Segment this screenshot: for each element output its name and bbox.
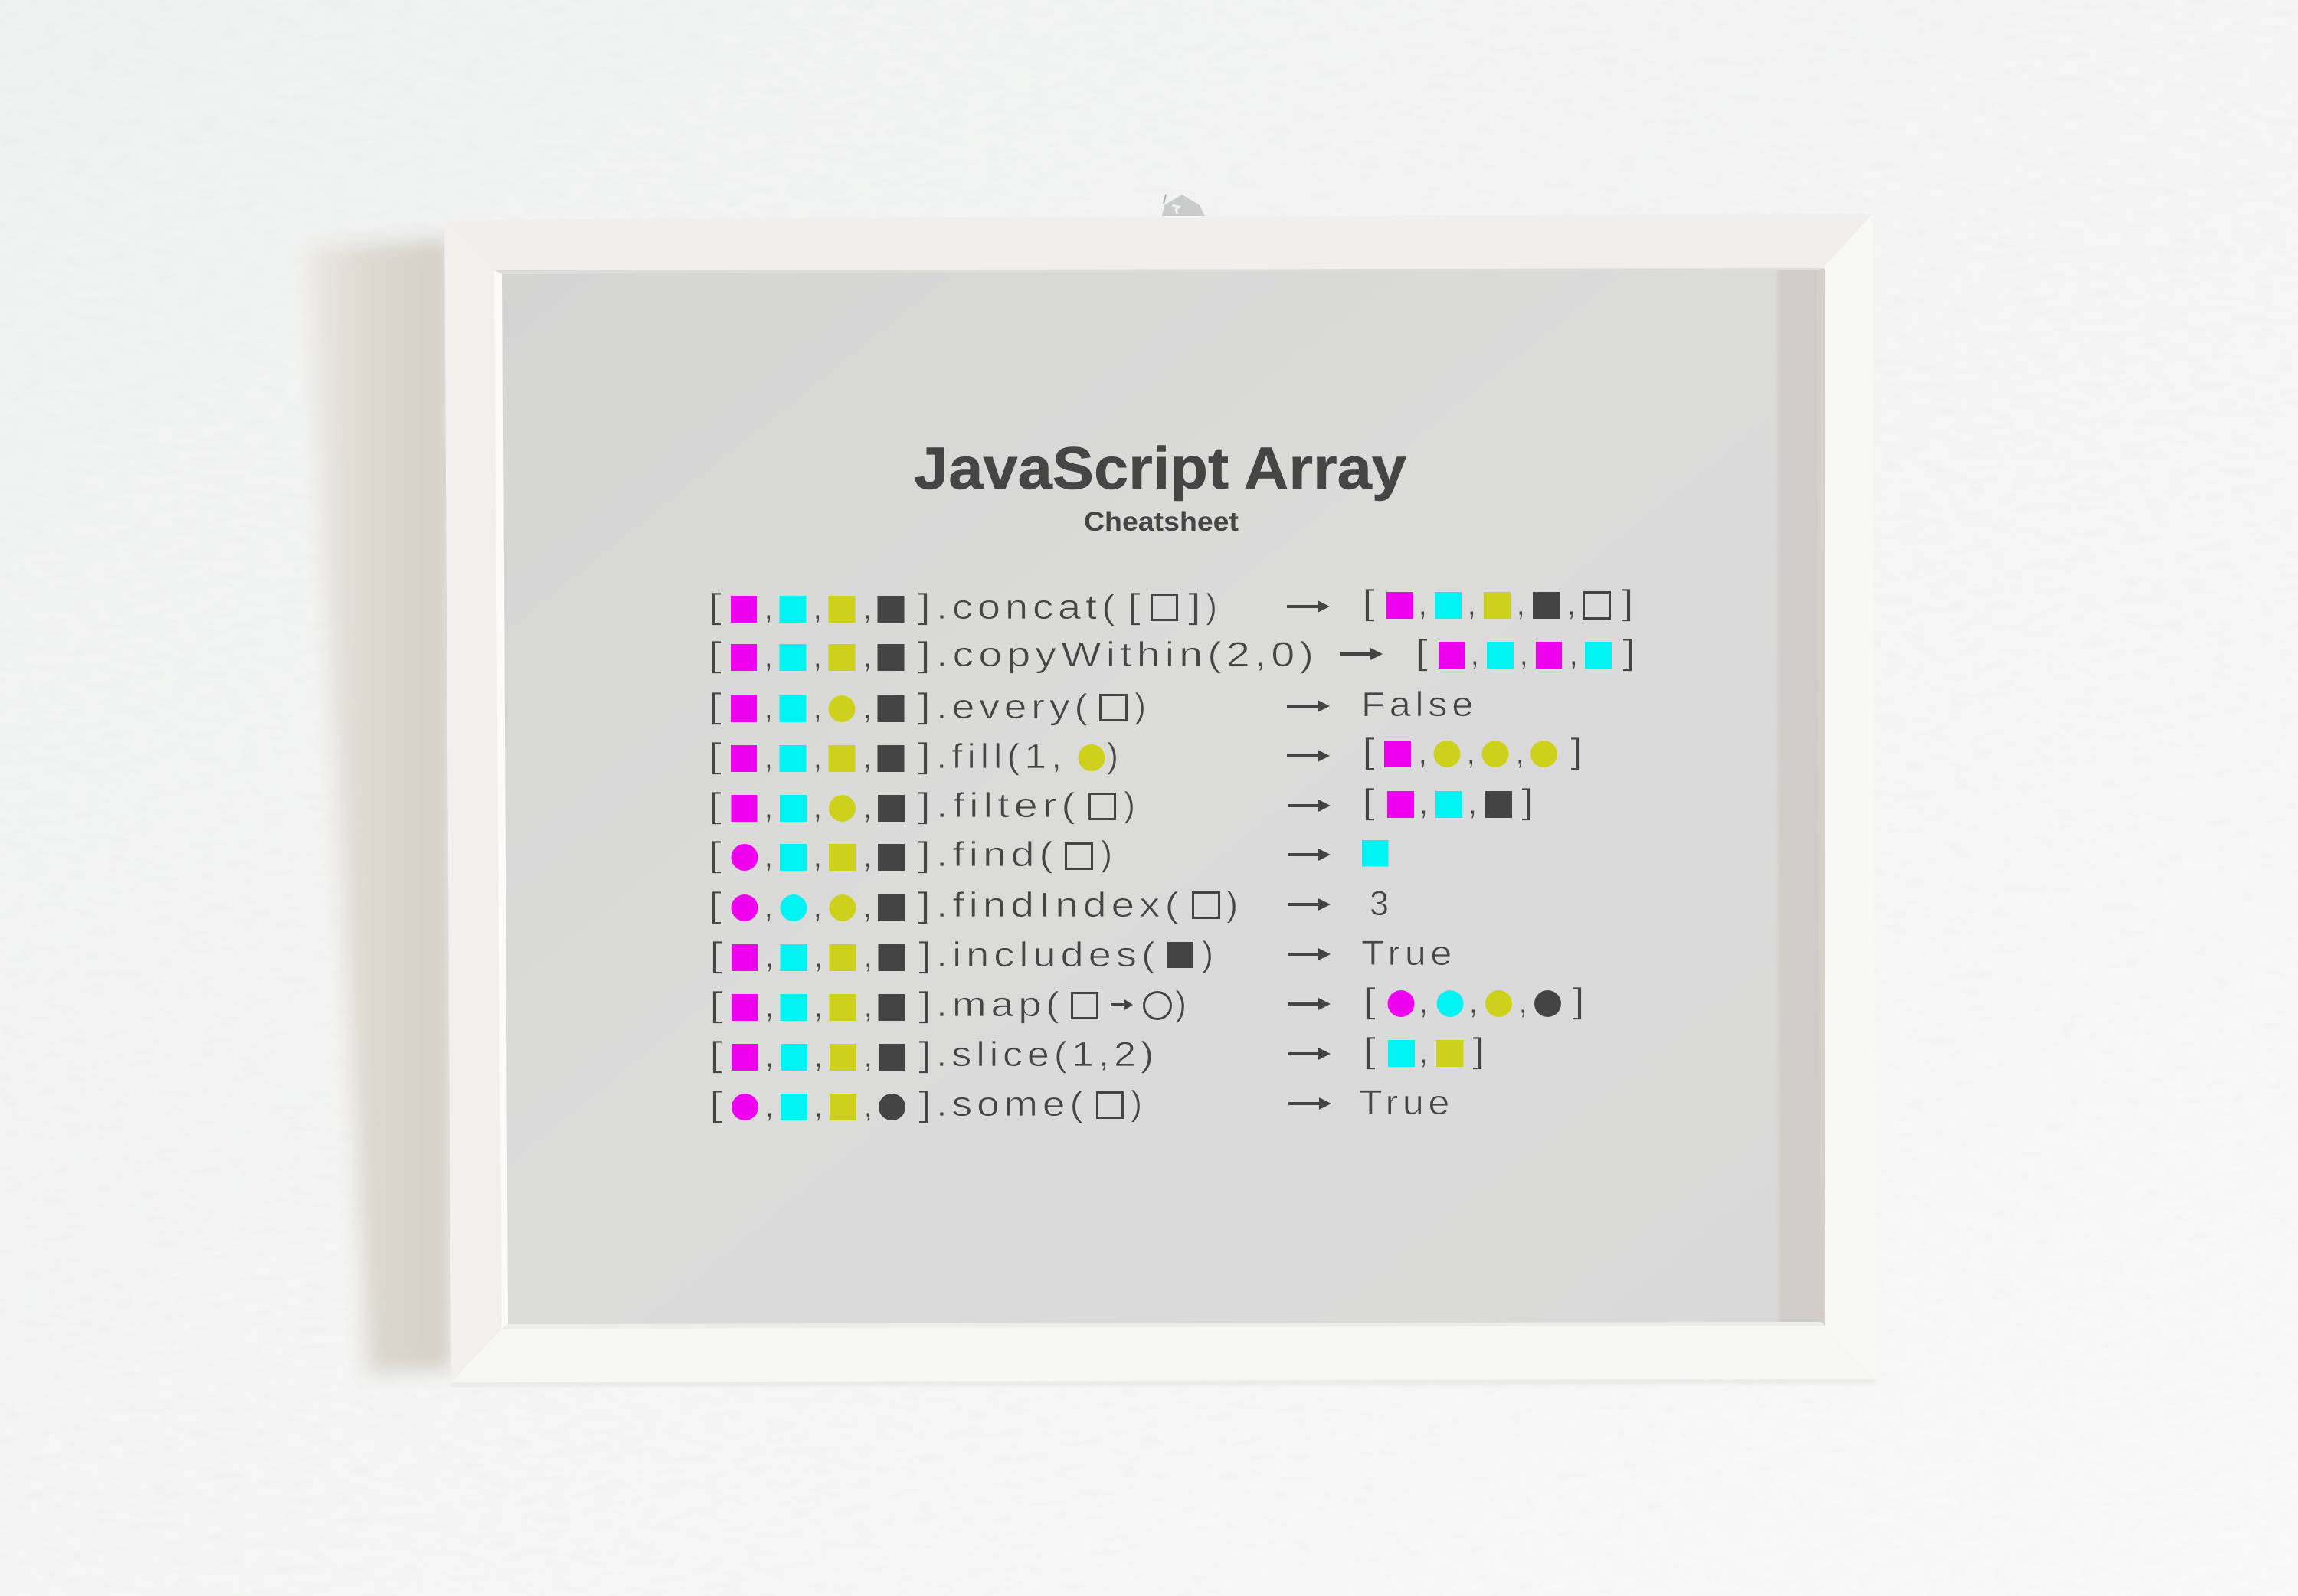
result bbox=[1362, 840, 1388, 867]
input array: ] bbox=[918, 985, 931, 1024]
input array: , bbox=[863, 636, 872, 675]
arrow bbox=[1340, 648, 1383, 660]
input array: , bbox=[764, 836, 774, 875]
row 5: filter bbox=[709, 782, 1534, 826]
method call bbox=[936, 984, 1187, 1024]
row 8: includes bbox=[709, 934, 1456, 975]
input array: , bbox=[764, 687, 774, 726]
result bbox=[1363, 1031, 1485, 1071]
result: , bbox=[1467, 584, 1477, 623]
result: , bbox=[1515, 732, 1525, 771]
arrow bbox=[1288, 898, 1331, 911]
row 2: copyWithin bbox=[709, 633, 1635, 675]
method call: .filter( bbox=[936, 786, 1080, 825]
input array: , bbox=[863, 836, 872, 875]
method call: ] bbox=[1188, 587, 1201, 626]
row 7: findIndex bbox=[709, 884, 1389, 925]
input array bbox=[709, 1084, 931, 1124]
icon: hanging nail bbox=[1162, 195, 1205, 216]
arrow bbox=[1288, 998, 1331, 1010]
input array: ] bbox=[918, 835, 931, 874]
input array: [ bbox=[709, 935, 723, 974]
input array: , bbox=[813, 787, 823, 826]
arrow bbox=[1288, 849, 1331, 861]
result: , bbox=[1419, 982, 1429, 1021]
result: ] bbox=[1621, 583, 1634, 622]
result: , bbox=[1468, 783, 1478, 822]
result: False bbox=[1361, 685, 1478, 724]
input array: , bbox=[863, 737, 872, 776]
arrow bbox=[1287, 750, 1330, 762]
input array: , bbox=[813, 936, 823, 975]
input array: , bbox=[863, 787, 872, 826]
input array: [ bbox=[709, 686, 722, 725]
result: , bbox=[1518, 982, 1528, 1021]
input array bbox=[709, 587, 931, 626]
result: [ bbox=[1362, 731, 1376, 770]
result: [ bbox=[1363, 1031, 1377, 1070]
input array: , bbox=[764, 1035, 774, 1074]
input array: , bbox=[764, 886, 774, 925]
result: , bbox=[1566, 584, 1576, 623]
frame left bar bbox=[444, 220, 502, 1382]
input array: , bbox=[863, 1085, 873, 1124]
method call: .fill(1, bbox=[936, 737, 1066, 776]
input array: ] bbox=[918, 1084, 931, 1123]
input array: , bbox=[813, 1085, 823, 1124]
input array bbox=[709, 985, 931, 1025]
result: , bbox=[1569, 633, 1579, 672]
method call bbox=[936, 885, 1238, 924]
input array: , bbox=[764, 787, 774, 826]
method call bbox=[936, 934, 1213, 974]
result: 3 bbox=[1370, 884, 1389, 923]
input array: , bbox=[764, 1085, 774, 1124]
method call: ) bbox=[1175, 984, 1187, 1023]
row 10: slice bbox=[709, 1031, 1485, 1074]
row 9: map bbox=[709, 981, 1585, 1025]
result: , bbox=[1519, 633, 1529, 672]
method call: ) bbox=[1107, 736, 1118, 775]
method call: ) bbox=[1131, 1084, 1142, 1123]
input array: [ bbox=[709, 587, 722, 626]
input array: , bbox=[764, 936, 774, 975]
method call: .includes( bbox=[936, 935, 1160, 974]
input array: [ bbox=[709, 736, 722, 775]
input array: , bbox=[863, 587, 872, 626]
result: , bbox=[1468, 982, 1478, 1021]
result: True bbox=[1361, 934, 1456, 973]
method call: .find( bbox=[936, 835, 1058, 874]
method call: ) bbox=[1206, 587, 1217, 626]
result bbox=[1362, 583, 1634, 623]
method call: [ bbox=[1128, 587, 1141, 626]
input array: [ bbox=[709, 835, 722, 874]
input array: , bbox=[764, 737, 774, 776]
result: ] bbox=[1521, 782, 1534, 821]
title: JavaScript Array bbox=[914, 434, 1406, 502]
method call: .map( bbox=[936, 985, 1064, 1024]
input array bbox=[709, 835, 931, 875]
frame top bar bbox=[444, 214, 1873, 270]
arrow bbox=[1288, 948, 1331, 960]
input array bbox=[709, 635, 931, 675]
method call: ) bbox=[1101, 834, 1112, 873]
result: ] bbox=[1622, 633, 1635, 672]
poster background bbox=[502, 270, 1821, 1324]
result: ] bbox=[1472, 1031, 1485, 1070]
method call bbox=[936, 785, 1135, 825]
method call: .slice(1,2) bbox=[936, 1035, 1158, 1074]
row 4: fill bbox=[709, 731, 1583, 776]
input array: , bbox=[813, 636, 823, 675]
input array: , bbox=[813, 687, 823, 726]
method call: ) bbox=[1134, 686, 1146, 725]
method call: .every( bbox=[936, 687, 1092, 726]
input array: , bbox=[813, 587, 823, 626]
input array: [ bbox=[709, 1035, 723, 1074]
method call: ) bbox=[1124, 785, 1135, 824]
method call: .concat( bbox=[936, 587, 1120, 626]
input array bbox=[709, 885, 931, 925]
method call bbox=[936, 834, 1112, 874]
result: , bbox=[1470, 633, 1480, 672]
picture frame bbox=[444, 214, 1875, 1387]
result: , bbox=[1418, 584, 1428, 623]
row 1: concat bbox=[709, 583, 1634, 626]
result: , bbox=[1516, 584, 1526, 623]
result bbox=[1415, 633, 1635, 672]
input array: ] bbox=[918, 1035, 931, 1074]
result: , bbox=[1419, 1032, 1429, 1071]
input array: , bbox=[813, 986, 823, 1025]
input array: , bbox=[813, 886, 823, 925]
arrow bbox=[1288, 1097, 1331, 1110]
result: ] bbox=[1570, 731, 1583, 770]
row 3: every bbox=[709, 685, 1478, 726]
input array: , bbox=[764, 636, 774, 675]
input array: , bbox=[813, 737, 823, 776]
input array: ] bbox=[918, 786, 931, 825]
result bbox=[1363, 981, 1585, 1021]
method call bbox=[936, 736, 1118, 776]
input array: [ bbox=[709, 1084, 723, 1123]
input array: ] bbox=[918, 885, 931, 924]
input array: [ bbox=[709, 885, 722, 924]
input array: ] bbox=[918, 736, 931, 775]
input array: [ bbox=[709, 985, 723, 1024]
frame inner bevel bbox=[494, 268, 1825, 1329]
result: [ bbox=[1362, 583, 1376, 622]
result: , bbox=[1418, 732, 1428, 771]
input array: ] bbox=[918, 635, 931, 674]
result bbox=[1362, 731, 1583, 771]
method call bbox=[936, 587, 1217, 626]
arrow bbox=[1287, 700, 1330, 712]
arrow bbox=[1288, 800, 1331, 812]
result: [ bbox=[1362, 782, 1376, 821]
result: [ bbox=[1363, 981, 1377, 1020]
input array: [ bbox=[709, 635, 722, 674]
hollow circle bbox=[1144, 993, 1170, 1019]
input array: , bbox=[863, 936, 873, 975]
result: ] bbox=[1572, 981, 1585, 1020]
frame bottom bar bbox=[451, 1326, 1875, 1382]
input array: ] bbox=[918, 587, 931, 626]
input array bbox=[709, 786, 931, 826]
row 6: find bbox=[709, 834, 1388, 875]
glass shadow strip bbox=[1777, 270, 1821, 1322]
method call: ) bbox=[1226, 885, 1238, 924]
result: True bbox=[1359, 1083, 1454, 1122]
input array bbox=[709, 935, 931, 975]
input array: , bbox=[764, 587, 774, 626]
method call: .some( bbox=[936, 1084, 1088, 1123]
result: , bbox=[1466, 732, 1476, 771]
input array: , bbox=[863, 687, 872, 726]
result: , bbox=[1419, 783, 1429, 822]
result bbox=[1362, 782, 1534, 822]
method call bbox=[936, 1084, 1142, 1123]
input array bbox=[709, 686, 931, 726]
subtitle: Cheatsheet bbox=[1084, 507, 1239, 537]
input array: , bbox=[813, 1035, 823, 1074]
frame right bar bbox=[1823, 214, 1875, 1379]
input array: , bbox=[863, 1035, 873, 1074]
input array bbox=[709, 1035, 931, 1074]
input array bbox=[709, 736, 931, 776]
input array: , bbox=[863, 886, 872, 925]
method call: .findIndex( bbox=[936, 885, 1183, 924]
arrow bbox=[1287, 600, 1330, 613]
input array: , bbox=[813, 836, 823, 875]
small arrow bbox=[1111, 999, 1133, 1010]
row 11: some bbox=[709, 1083, 1454, 1124]
frame bottom edge shadow bbox=[451, 1379, 1875, 1387]
input array: ] bbox=[918, 686, 931, 725]
input array: , bbox=[764, 986, 774, 1025]
input array: , bbox=[863, 986, 873, 1025]
method call bbox=[936, 686, 1146, 726]
arrow bbox=[1288, 1048, 1331, 1060]
method call: ) bbox=[1202, 934, 1213, 973]
frame shadow on wall bbox=[308, 239, 452, 1374]
input array: [ bbox=[709, 786, 722, 825]
result: [ bbox=[1415, 633, 1429, 672]
input array: ] bbox=[918, 935, 931, 974]
method call: .copyWithin(2,0) bbox=[936, 635, 1318, 674]
